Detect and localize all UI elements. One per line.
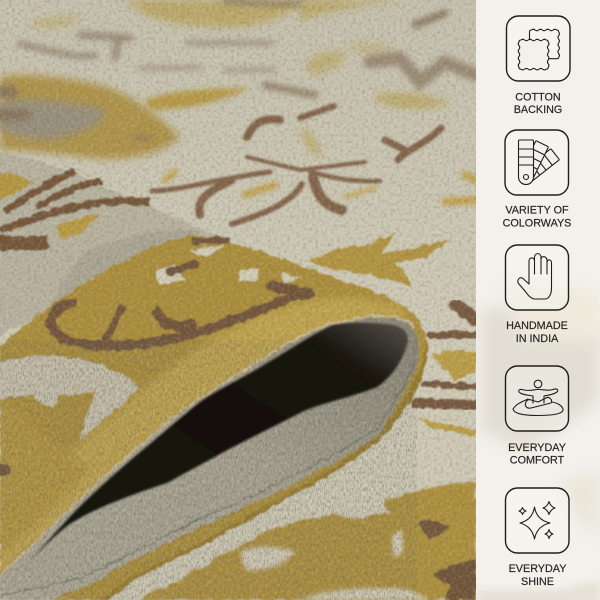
rug photograph: background pile — [0, 0, 476, 600]
icon: cotton backing swatches — [506, 16, 570, 81]
bottom right gold motif — [140, 480, 476, 600]
gold highlight band along the fold — [0, 298, 430, 600]
rug corner flap: grey field with brown strokes — [0, 153, 222, 340]
gold leaf motif, right — [310, 233, 450, 285]
label: cotton backing: COTTON — [515, 92, 561, 104]
cream edge of the opening — [0, 316, 414, 576]
rolled rug: gold border top — [0, 235, 430, 600]
icon: handmade hand — [506, 245, 568, 310]
label: cotton backing: BACKING — [514, 104, 562, 116]
icon: colorways fan deck — [505, 130, 568, 195]
label: everyday shine: SHINE — [521, 576, 554, 588]
icon: everyday shine sparkles — [506, 488, 569, 553]
right brown stripes — [415, 305, 476, 405]
brown scroll in border — [0, 240, 310, 470]
label: variety of colorways: VARIETY OF — [505, 204, 569, 216]
label: everyday comfort: EVERYDAY — [508, 442, 566, 454]
pile texture overlay — [0, 0, 476, 600]
dark inner opening of roll — [14, 323, 408, 578]
label: everyday shine: EVERYDAY — [509, 563, 566, 575]
label: handmade in india: HANDMADE — [506, 320, 568, 332]
label: everyday comfort: COMFORT — [510, 454, 565, 466]
cream patches in border — [0, 356, 137, 440]
central brown floral motif — [152, 106, 441, 224]
label: variety of colorways: COLORWAYS — [503, 218, 571, 230]
grey cotton backing — [0, 318, 419, 600]
backing stitch texture — [0, 340, 417, 600]
backing seam — [0, 365, 414, 596]
panel: feature column — [476, 0, 600, 600]
left blurred floral medallion — [0, 75, 180, 159]
label: handmade in india: IN INDIA — [516, 333, 559, 345]
icon: everyday comfort meditation — [506, 366, 568, 431]
